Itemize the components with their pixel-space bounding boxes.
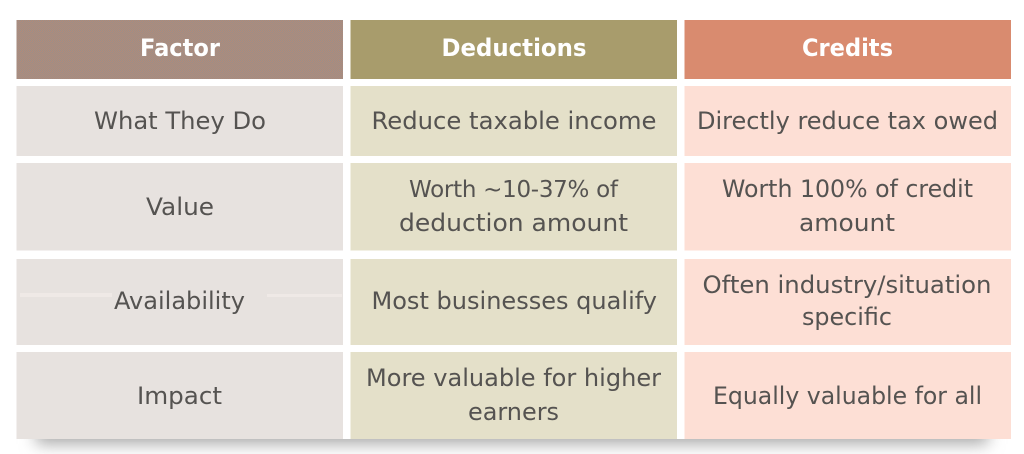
header: Factor: Factor [140,34,220,62]
cell: Directly reduce tax owed: Directly reduce tax owed [697,107,998,135]
cell: Equally valuable for all: Equally valuable for all [713,382,982,410]
table drop shadow [28,439,996,454]
cell: Worth 10-37% of deduction amount [350,163,677,250]
header: Factor [16,20,343,79]
header: Credits: Credits [802,34,893,62]
cell: Reduce taxable income: Reduce taxable income [372,107,656,135]
header: Credits [684,20,1011,79]
cell: Value: Value [146,193,214,221]
cell: Most businesses qualify: Most businesses qualify [372,287,657,315]
cell: Availability [16,259,343,345]
cell: Most businesses qualify [350,259,677,345]
header: Deductions: Deductions [442,34,586,62]
cell: Worth 100% of credit amount: amount [799,209,895,237]
row: Impact [16,352,1011,439]
cell: What They Do [16,86,343,156]
cell: More valuable for higher earners: earners [468,398,559,426]
cell: Availability: Availability [114,287,245,315]
cell: Worth 100% of credit amount: Worth 100% of credit [722,175,973,203]
row: Value [16,163,1011,250]
cell: Equally valuable for all [684,352,1011,439]
cell: Worth 10-37% of deduction amount: Worth ~10-37% of [409,177,619,203]
header row [16,20,1011,79]
cell: Impact: Impact [137,382,222,410]
cell: Reduce taxable income [350,86,677,156]
cell: What They Do: What They Do [94,107,266,135]
cell: Often industry/situation specific: specific [802,303,892,331]
header: Deductions [350,20,677,79]
cell: Often industry/situation specific [684,259,1011,345]
row: Availability [16,259,1011,345]
cell: More valuable for higher earners: More valuable for higher [366,364,661,392]
cell: Worth 10-37% of deduction amount: deduction amount [399,209,628,237]
cell: Often industry/situation specific: Often industry/situation [702,271,992,299]
cell: More valuable for higher earners [350,352,677,439]
cell: Worth 100% of credit amount [684,163,1011,250]
cell: Directly reduce tax owed [684,86,1011,156]
row: What They Do [16,86,1011,156]
cell: Impact [16,352,343,439]
cell: Value [16,163,343,250]
